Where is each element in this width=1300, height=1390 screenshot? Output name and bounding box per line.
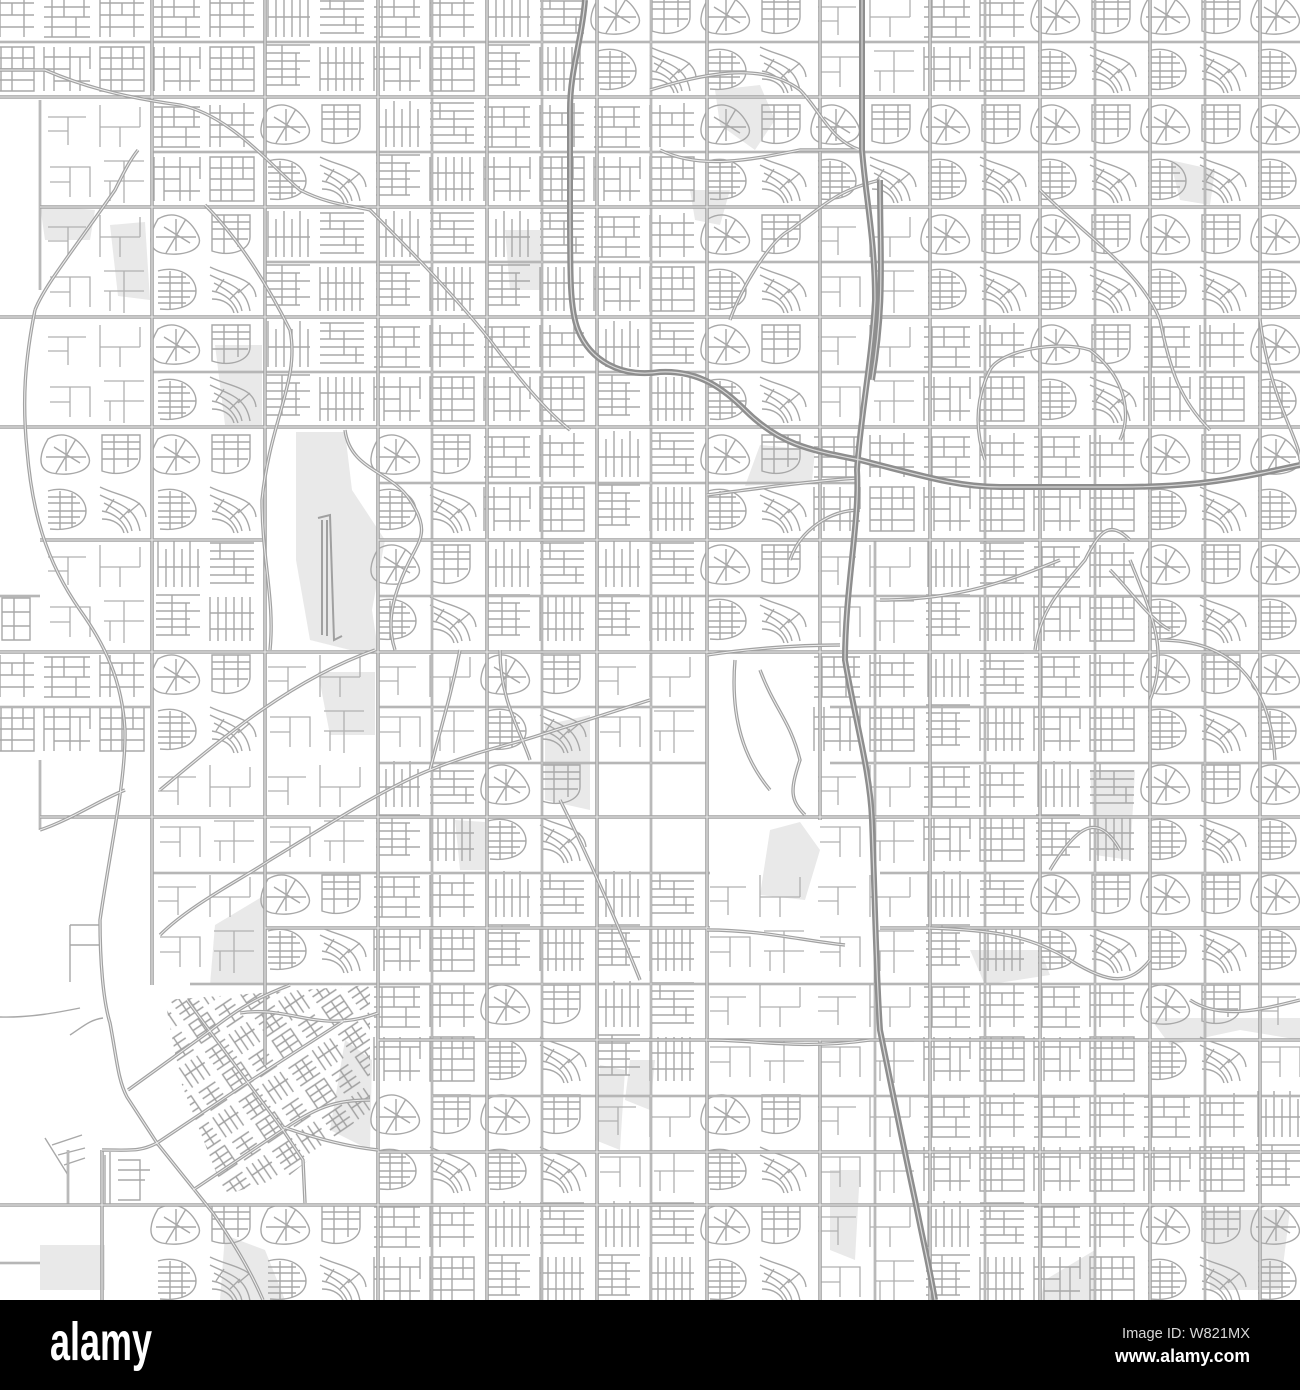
website: www.alamy.com: [1114, 1346, 1250, 1366]
southwest town centre streets: [165, 985, 370, 1195]
image id: Image ID: W821MX: [1122, 1325, 1250, 1342]
footer logo: alamy: [50, 1312, 152, 1372]
far-left neighbourhoods: [0, 598, 150, 1205]
freeways: [570, 0, 1300, 1300]
airport runway: [318, 515, 342, 640]
footer bar: [0, 1300, 1300, 1390]
